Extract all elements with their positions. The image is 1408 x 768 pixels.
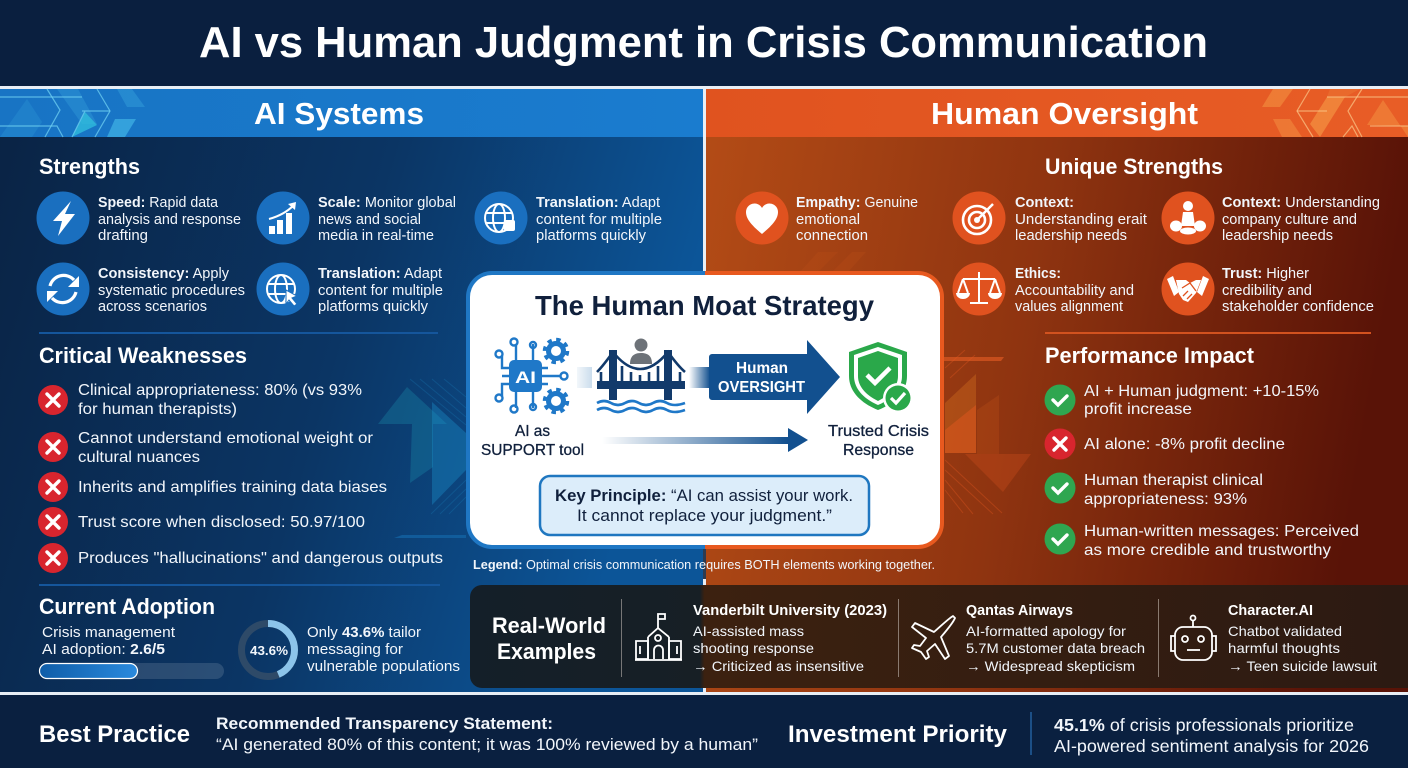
text: Qantas: AI-formatted apology for xyxy=(966,623,1126,639)
icon: cross 1 xyxy=(38,385,68,415)
investment statement: 45.1% of crisis professionals prioritize xyxy=(1054,715,1354,735)
transparency statement: “AI generated 80% of this content; it was 100% reviewed by a human” xyxy=(216,735,758,754)
text: context culture xyxy=(1222,195,1380,244)
icon: translation globe xyxy=(474,192,528,244)
heading: performance impact: Performance Impact xyxy=(1045,343,1255,368)
panel: performance impact xyxy=(1044,343,1359,559)
text: empathy: emotional xyxy=(796,212,860,228)
icon: AI chip: AI xyxy=(515,368,536,387)
text: trust: Trust: Higher xyxy=(1222,266,1309,282)
text: vulnerable populations: vulnerable populations xyxy=(307,658,460,675)
text: ethics xyxy=(1015,266,1134,315)
text: AI alone: AI alone: -8% profit decline xyxy=(1084,436,1285,453)
footer xyxy=(0,695,1408,768)
text: scale: news and social xyxy=(318,212,421,228)
section header: Human Oversight: Human Oversight xyxy=(931,96,1198,131)
text: consistency: Consistency: Apply xyxy=(98,266,230,282)
text: hallucinations: Produces "hallucinations" and dangerous outputs xyxy=(78,550,443,567)
heading: current adoption: Current Adoption xyxy=(39,594,215,619)
panel: current adoption xyxy=(39,594,460,679)
connector: AI to bridge xyxy=(577,367,592,388)
text: Vanderbilt: AI-assisted mass xyxy=(693,623,804,639)
arrow: human oversight xyxy=(709,340,840,414)
text: Qantas: → Widespread skepticism xyxy=(966,658,1135,674)
icon: robot xyxy=(1171,616,1216,660)
text: context: Context: xyxy=(1015,195,1074,211)
text: scale: media in real-time xyxy=(318,228,434,244)
text: context culture: leadership needs xyxy=(1222,228,1333,244)
text: translation second: Translation: Adapt xyxy=(318,266,442,282)
callout: key principle: Key Principle: “AI can assist your work. xyxy=(555,486,853,505)
text: clinical appropriateness xyxy=(78,382,362,418)
heading: real-world examples: Examples xyxy=(497,639,596,664)
transparency statement: Recommended Transparency Statement: xyxy=(216,714,553,733)
text: Vanderbilt: shooting response xyxy=(693,640,814,656)
panel: human unique strengths xyxy=(736,154,1380,316)
text: trust xyxy=(1222,266,1374,315)
panel: real-world examples xyxy=(470,585,1408,688)
text: Qantas: 5.7M customer data breach xyxy=(966,640,1145,656)
arrow: progress xyxy=(602,428,808,452)
text: speed xyxy=(98,195,241,244)
text: scale: Scale: Monitor global xyxy=(318,195,456,211)
text: Qantas xyxy=(966,603,1145,674)
text: empathy xyxy=(796,195,918,244)
text: AI plus human: AI + Human judgment: +10-15% xyxy=(1084,383,1319,400)
text: empathy: connection xyxy=(796,228,868,244)
label: AI as support tool xyxy=(481,423,584,459)
investment priority heading: Investment Priority xyxy=(788,721,1008,748)
arrow: human oversight: Human xyxy=(736,360,788,377)
text: speed: Speed: Rapid data xyxy=(98,195,219,211)
title banner xyxy=(0,0,1408,86)
icon: translation cursor globe xyxy=(256,262,310,316)
icon: heart xyxy=(736,192,788,244)
text: Vanderbilt xyxy=(693,603,887,674)
text: human written: as more credible and trustworthy xyxy=(1084,542,1331,559)
icon: scale chart xyxy=(256,192,310,244)
text: Character.AI: Character.AI xyxy=(1228,603,1313,619)
text: context: leadership needs xyxy=(1015,228,1127,244)
text: translation second: platforms quickly xyxy=(318,299,429,315)
icon: check 3 xyxy=(1044,524,1076,554)
text: trust: stakeholder confidence xyxy=(1222,299,1374,315)
investment statement xyxy=(1054,715,1369,756)
text: Qantas: Qantas Airways xyxy=(966,603,1073,619)
text: emotional weight xyxy=(78,430,374,466)
text: consistency xyxy=(98,266,245,315)
heading: moat strategy: The Human Moat Strategy xyxy=(535,290,874,321)
text: human therapist: Human therapist clinical xyxy=(1084,472,1263,489)
label: trusted crisis response xyxy=(828,423,929,459)
icon: scales xyxy=(952,262,1006,316)
label: AI as support tool: AI as xyxy=(515,423,550,440)
best practice heading: Best Practice xyxy=(39,721,190,748)
text: Character.AI: → Teen suicide lawsuit xyxy=(1228,658,1377,674)
text: human therapist xyxy=(1084,472,1263,508)
text: adoption score xyxy=(42,624,176,658)
text: Character.AI: harmful thoughts xyxy=(1228,640,1340,656)
transparency statement xyxy=(216,714,758,754)
text: translation: content for multiple xyxy=(536,212,662,228)
icon: speed lightning xyxy=(36,192,90,244)
text: clinical appropriateness: Clinical appropriateness: 80% (vs 93% xyxy=(78,382,362,399)
panel: critical weaknesses xyxy=(38,343,443,573)
text: context xyxy=(1015,195,1147,244)
text: scale xyxy=(318,195,456,244)
icon: cross xyxy=(1044,428,1076,460)
icon: handshake xyxy=(1162,262,1214,316)
icon: green shield xyxy=(849,342,913,413)
text: biases: Inherits and amplifies training data biases xyxy=(78,479,387,496)
investment statement: AI-powered sentiment analysis for 2026 xyxy=(1054,736,1369,756)
text: Vanderbilt: → Criticized as insensitive xyxy=(693,658,864,674)
text: vulnerable populations xyxy=(307,624,460,675)
heading: critical weaknesses: Critical Weaknesses xyxy=(39,343,247,368)
label: AI as support tool: SUPPORT tool xyxy=(481,442,584,459)
icon: cross 3 xyxy=(38,472,68,502)
text: context: Understanding erait xyxy=(1015,212,1147,228)
heading: real-world examples: Real-World xyxy=(492,613,606,638)
text: emotional weight: cultural nuances xyxy=(78,449,200,466)
text: human therapist: appropriateness: 93% xyxy=(1084,491,1247,508)
title: AI vs Human Judgment in Crisis Communication xyxy=(199,18,1208,67)
donut chart: 43.6% xyxy=(250,643,288,658)
label: trusted crisis response: Response xyxy=(843,442,914,459)
text: Character.AI xyxy=(1228,603,1377,674)
text: ethics: values alignment xyxy=(1015,299,1123,315)
text: translation second xyxy=(318,266,443,315)
heading: unique strengths: Unique Strengths xyxy=(1045,154,1223,179)
text: AI plus human xyxy=(1084,383,1319,418)
callout: key principle: It cannot replace your judgment.” xyxy=(577,506,832,525)
text: consistency: systematic procedures xyxy=(98,283,245,299)
section header: AI Systems: AI Systems xyxy=(254,96,424,131)
icon: school xyxy=(635,614,682,660)
donut chart xyxy=(242,624,294,676)
label: trusted crisis response: Trusted Crisis xyxy=(828,423,929,440)
icon: people xyxy=(1162,192,1214,244)
panel: AI strengths xyxy=(36,154,662,316)
text: trust: credibility and xyxy=(1222,283,1312,299)
heading: strengths: Strengths xyxy=(39,154,140,179)
text: speed: analysis and response xyxy=(98,212,241,228)
text: clinical appropriateness: for human therapists) xyxy=(78,401,237,418)
text: human written: Human-written messages: Perceived xyxy=(1084,523,1359,540)
panel: human oversight background xyxy=(706,89,1408,692)
text: translation xyxy=(536,195,662,244)
text: translation second: content for multiple xyxy=(318,283,443,299)
icon: consistency arrows xyxy=(36,262,90,316)
icon: cross 4 xyxy=(38,507,68,537)
panel: AI systems background xyxy=(0,89,703,692)
callout: key principle xyxy=(540,476,869,535)
icon: cross 5 xyxy=(38,543,68,573)
text: Vanderbilt: Vanderbilt University (2023) xyxy=(693,603,887,619)
icon: plane xyxy=(912,616,955,659)
text: AI plus human: profit increase xyxy=(1084,401,1192,418)
text: adoption score: AI adoption: 2.6/5 xyxy=(42,641,165,658)
text: context culture: Context: Understanding xyxy=(1222,195,1380,211)
progress bar xyxy=(39,663,224,679)
text: ethics: Accountability and xyxy=(1015,283,1134,299)
icon: check 2 xyxy=(1044,472,1076,504)
text: context culture: company culture and xyxy=(1222,212,1357,228)
text: Character.AI: Chatbot validated xyxy=(1228,623,1342,639)
text: ethics: Ethics: xyxy=(1015,266,1061,282)
icon: AI chip xyxy=(496,338,568,412)
text: empathy: Empathy: Genuine xyxy=(796,195,918,211)
text: trust score: Trust score when disclosed: 50.97/100 xyxy=(78,514,365,531)
legend: Legend: Optimal crisis communication requires BOTH elements working together. xyxy=(473,558,935,572)
connector: bridge to arrow xyxy=(689,367,710,388)
text: translation: Translation: Adapt xyxy=(536,195,660,211)
icon: check 1 xyxy=(1044,384,1076,416)
text: vulnerable populations: messaging for xyxy=(307,641,403,658)
text: consistency: across scenarios xyxy=(98,299,207,315)
text: translation: platforms quickly xyxy=(536,228,647,244)
icon: cross 2 xyxy=(38,432,68,462)
icon: bridge with person xyxy=(597,338,685,412)
heading: real-world examples xyxy=(492,613,606,664)
text: human written xyxy=(1084,523,1359,559)
text: emotional weight: Cannot understand emotional weight or xyxy=(78,430,374,447)
arrow: human oversight: OVERSIGHT xyxy=(718,379,806,396)
text: speed: drafting xyxy=(98,228,148,244)
panel: human moat strategy card xyxy=(466,271,944,549)
icon: target xyxy=(952,192,1006,244)
text: vulnerable populations: Only 43.6% tailor xyxy=(307,624,421,641)
text: adoption score: Crisis management xyxy=(42,624,176,641)
